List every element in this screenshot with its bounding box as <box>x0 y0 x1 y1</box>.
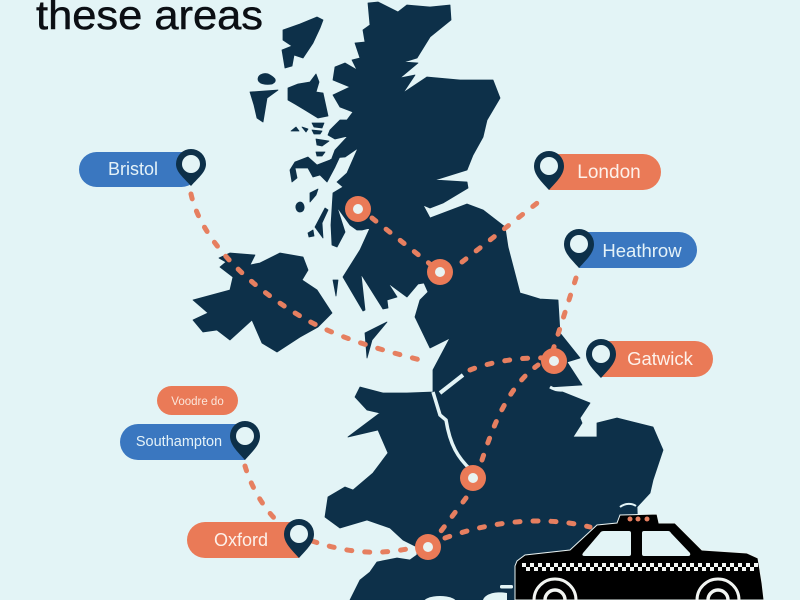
taxi rear window <box>582 531 631 556</box>
icon: black taxi <box>515 514 764 600</box>
taxi front window <box>642 531 690 556</box>
label: Heathrow <box>564 229 697 268</box>
node: Midlands <box>460 465 486 491</box>
node: west Scotland <box>345 196 371 222</box>
label: Gatwick: Gatwick <box>627 348 694 369</box>
label: Heathrow: Heathrow <box>602 240 682 261</box>
Hebrides west island <box>250 90 278 122</box>
small label: Voodre do <box>157 386 238 415</box>
North Channel sliver <box>333 280 338 296</box>
Ireland <box>193 253 332 352</box>
taxi checker strip <box>522 563 758 571</box>
label: Gatwick <box>586 339 713 378</box>
front wheel <box>697 579 739 600</box>
Irish Sea island <box>365 322 387 358</box>
taxi body <box>515 514 764 600</box>
label: London <box>534 151 661 190</box>
label: Southampton: Southampton <box>136 434 222 450</box>
small label: Voodre do: Voodre do <box>171 396 224 408</box>
node: north-east England <box>541 348 567 374</box>
label: Southampton <box>120 421 260 460</box>
Hebrides small island <box>258 74 275 84</box>
rear wheel <box>534 579 576 600</box>
label: Oxford: Oxford <box>214 530 268 550</box>
node: south coast <box>415 534 441 560</box>
Skye <box>288 74 328 118</box>
Outer Hebrides north <box>282 17 323 68</box>
label: Bristol <box>79 149 206 187</box>
label: Bristol: Bristol <box>108 159 158 179</box>
Inner Hebrides group <box>290 123 342 238</box>
label: London: London <box>577 162 641 183</box>
dashed routes <box>191 194 590 552</box>
route nodes <box>345 196 567 560</box>
map of the UK and Ireland <box>193 2 663 600</box>
Wales and England river and coast lines <box>433 375 636 507</box>
node: southern Scotland <box>427 259 453 285</box>
label: Oxford <box>187 519 314 558</box>
southern coast inlets <box>423 585 513 600</box>
Great Britain mainland <box>325 2 663 600</box>
taxi roof lights <box>628 516 650 522</box>
